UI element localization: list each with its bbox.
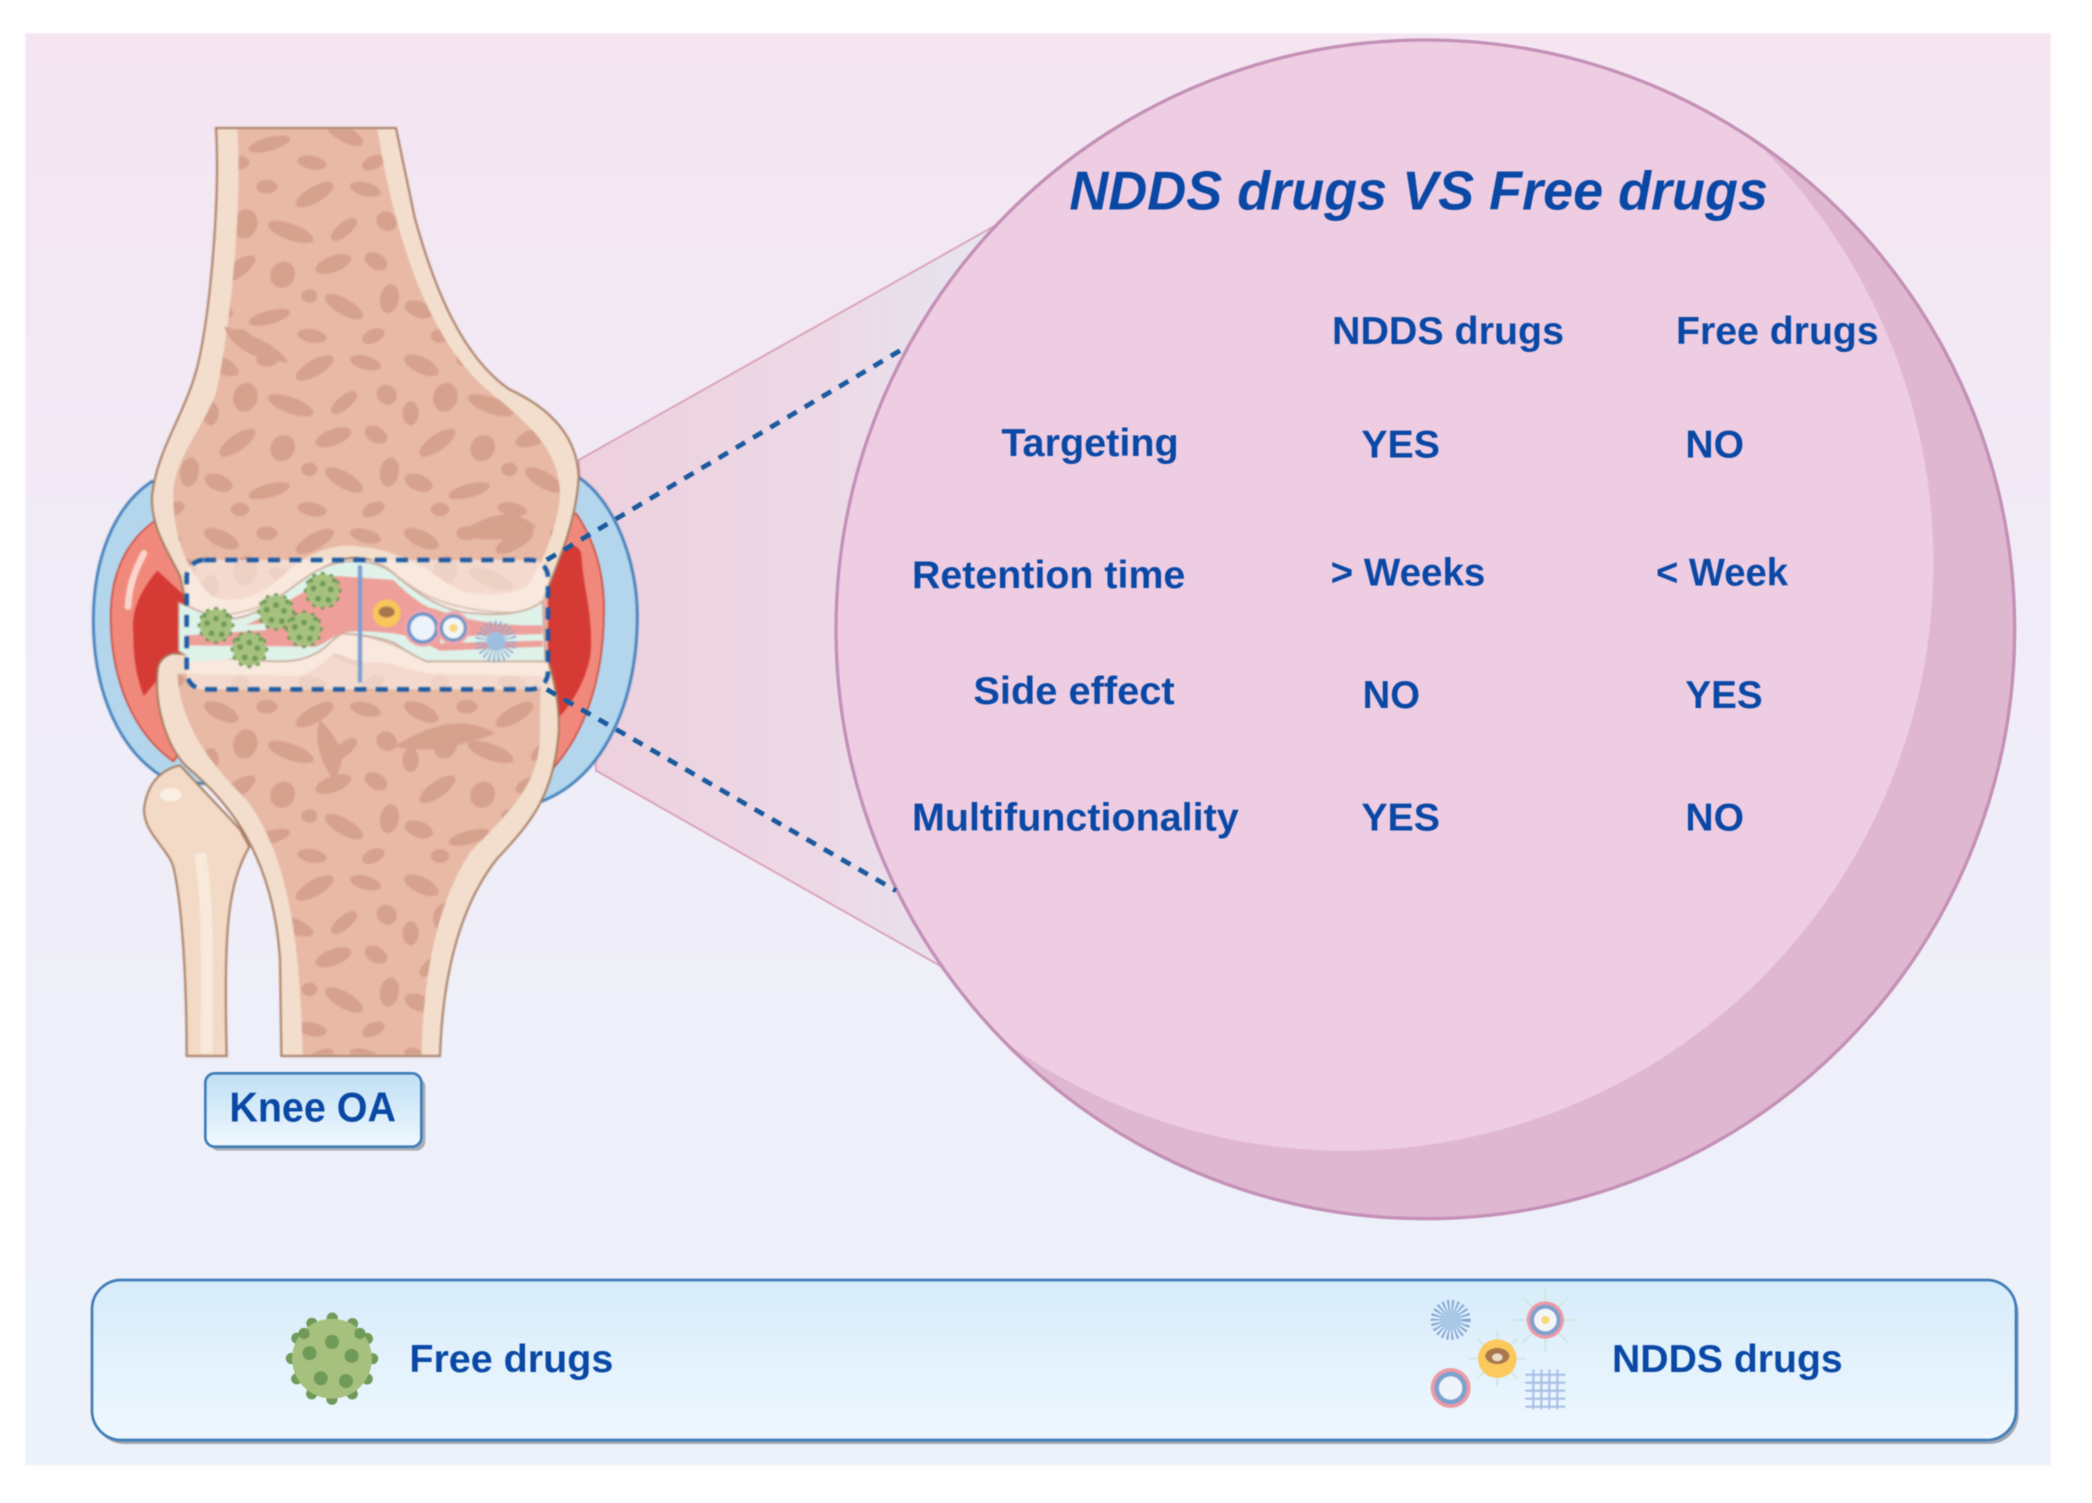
- dashed zoom lines: [547, 347, 907, 891]
- tibia: [157, 633, 559, 1056]
- icon: NDDS nanocarriers: [1431, 1288, 1577, 1409]
- zoom cone from knee to circle: [579, 227, 993, 968]
- fibula: [144, 765, 249, 1056]
- knee OA label: Knee OA: [229, 1084, 396, 1130]
- row: retention time: < Week: [1656, 550, 1788, 594]
- icon: free drug: [291, 1318, 373, 1399]
- row: targeting: YES: [1361, 422, 1440, 466]
- synovial cavity: [179, 561, 545, 661]
- row: retention time: > Weeks: [1331, 550, 1485, 594]
- dashed zoom box: [187, 560, 548, 689]
- row: retention time: [912, 550, 1788, 597]
- large femoral trabecular cavities: [224, 327, 536, 539]
- legend panel: [92, 1280, 2019, 1444]
- row: side effect: NO: [1363, 673, 1420, 717]
- NDDS particles in joint: [373, 599, 511, 656]
- faded zoom region: [187, 560, 548, 689]
- row: targeting: NO: [1685, 422, 1744, 466]
- row: retention time: Retention time: [912, 553, 1185, 597]
- free drug particles in joint: [200, 574, 339, 666]
- row: multifunctionality: YES: [1361, 796, 1440, 840]
- left synovium: [111, 520, 227, 761]
- right joint capsule: [507, 477, 637, 805]
- joint centre divider: [358, 565, 362, 683]
- legend label: NDDS drugs: NDDS drugs: [1612, 1337, 1843, 1381]
- comparison table: [912, 309, 1879, 840]
- left joint capsule: [93, 481, 233, 787]
- row: multifunctionality: Multifunctionality: [912, 796, 1239, 840]
- right synovium: [527, 513, 604, 768]
- column headers: [1332, 309, 1879, 353]
- legend label: free drugs: Free drugs: [409, 1337, 613, 1381]
- row: targeting: [1001, 421, 1744, 466]
- magnified circle: [757, 0, 2015, 1219]
- row: targeting: Targeting: [1001, 421, 1179, 465]
- column headers: Free drugs: [1676, 309, 1879, 353]
- femur: [152, 128, 579, 615]
- knee joint illustration: [93, 128, 637, 1056]
- row: multifunctionality: NO: [1685, 796, 1744, 840]
- knee OA label: [205, 1073, 425, 1151]
- row: side effect: Side effect: [973, 669, 1175, 713]
- row: side effect: YES: [1685, 673, 1763, 717]
- title: NDDS drugs VS Free drugs: [1069, 160, 1768, 221]
- row: multifunctionality: [912, 796, 1744, 840]
- column headers: NDDS drugs: [1332, 309, 1564, 353]
- large tibial trabecular cavities: [317, 720, 496, 780]
- row: side effect: [973, 669, 1763, 717]
